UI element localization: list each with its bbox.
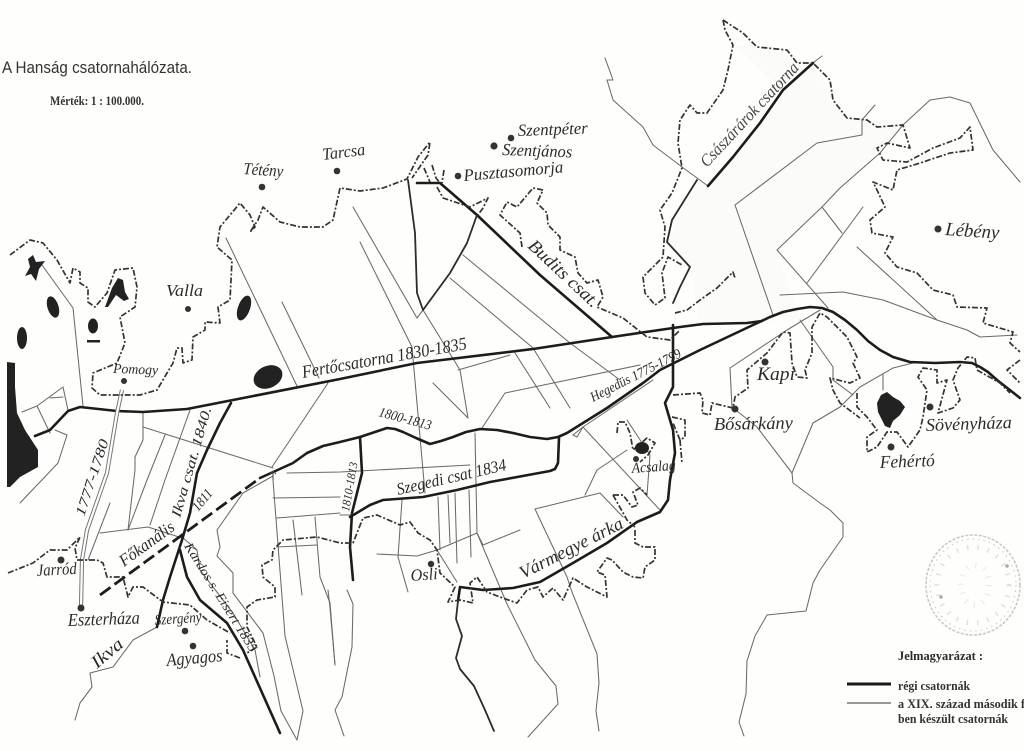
- canal: Szegedi: [350, 438, 559, 517]
- place name: Eszterháza: Eszterháza: [67, 607, 140, 630]
- canal: north connector: [667, 180, 697, 303]
- place name: Szergény: Szergény: [154, 610, 202, 629]
- canal: double dotted 1777-1780: [81, 390, 122, 607]
- pond: Fehértó lake: [877, 392, 905, 428]
- label: 1811: 1811: [190, 487, 216, 515]
- legend item: old canals: régi csatornák: [898, 679, 970, 693]
- place name: Tarcsa: Tarcsa: [321, 140, 366, 164]
- label: 1810-1813: 1810-1813: [338, 461, 361, 513]
- legend item: new canals: [847, 697, 1024, 726]
- place name: Pomogy: Pomogy: [112, 362, 159, 379]
- place name: Szentjános: Szentjános: [502, 140, 573, 161]
- label: Kardos és Eisert 1835: Kardos s. Eisert 1835: [181, 539, 261, 655]
- canal: Ikva: [157, 403, 231, 627]
- library stamp: [926, 535, 1020, 635]
- legend: [847, 648, 1024, 726]
- label: Főkanális: Főkanális: [114, 517, 178, 571]
- label: Vármegye árka: Vármegye árka: [516, 513, 626, 583]
- label: Ikva river: Ikva: [86, 634, 127, 673]
- canal: Császárárok: [708, 63, 813, 186]
- pond: oval 3: [88, 318, 98, 334]
- label: Szegedi csat 1834: Szegedi csat 1834: [395, 455, 508, 499]
- canal: Főkanális dashed: [100, 478, 260, 595]
- label: Hegedüs 1775-1799: Hegedüs 1775-1799: [587, 347, 684, 406]
- label: Fertőcsatorna 1830-1835: Fertőcsatorna 1830-1835: [299, 333, 468, 382]
- settlements: [36, 119, 1012, 670]
- canal: Fertőcsatorna: [35, 321, 762, 436]
- label: 1800-1813: 1800-1813: [377, 405, 433, 434]
- dots: [58, 135, 942, 649]
- place name: Agyagos: Agyagos: [165, 645, 223, 670]
- place name: Bősárkány: Bősárkány: [714, 413, 793, 434]
- legend item: new canals: a XIX. század második f: [898, 697, 1024, 711]
- scale note: Mérték: 1 : 100.000.: [50, 94, 144, 108]
- place name: Pusztasomorja: Pusztasomorja: [462, 157, 564, 185]
- place name: Osli: Osli: [410, 564, 438, 585]
- place name: Fehértó: Fehértó: [878, 450, 935, 472]
- pond: small bar: [87, 340, 100, 342]
- legend heading: Jelmagyarázat :: [898, 648, 983, 663]
- label: Ikva csat. 1840: Ikva csat. 1840.: [169, 405, 215, 520]
- canal: Vármegye árka: [458, 325, 675, 601]
- place name: Lébény: Lébény: [944, 219, 1001, 244]
- river: south of Vármegye árka: [456, 601, 494, 731]
- pond: near Fertő canal: [250, 361, 286, 393]
- canal: Hegedüs and 1800-1813: [260, 307, 1020, 478]
- place name: Jarród: Jarród: [36, 559, 78, 580]
- legend item: new canals: ben készült csatornák: [898, 712, 1008, 726]
- marsh ponds: [7, 255, 905, 487]
- canal: triangle: [408, 180, 477, 310]
- pond: Acsalag: [635, 442, 649, 454]
- canal labels: [74, 58, 803, 673]
- pond: oval 2: [17, 327, 27, 349]
- title: A Hanság csatornahálózata.: [2, 58, 192, 77]
- place name: Acsalag: Acsalag: [630, 458, 677, 477]
- label: 1777-1780: 1777-1780: [74, 438, 113, 518]
- pond: large western lake: [7, 362, 38, 487]
- place name: Szentpéter: Szentpéter: [517, 119, 588, 140]
- canal: 1810-1813: [350, 437, 362, 580]
- pond: east of Valla: [234, 294, 254, 322]
- pond: star: [25, 255, 45, 281]
- pond: A-shaped: [105, 278, 129, 307]
- canal: Kardos és Eisert: [180, 550, 280, 733]
- pond: oval 1: [44, 295, 62, 319]
- label: Budits csat.: Budits csat.: [524, 235, 604, 311]
- place name: Sövényháza: Sövényháza: [925, 412, 1012, 435]
- place name: Tétény: Tétény: [243, 159, 284, 181]
- arrow at junction: [270, 471, 276, 480]
- legend item: old canals: [847, 679, 970, 693]
- label: Császárárok csatorna: Császárárok csatorna: [696, 58, 803, 171]
- canal: Budits: [417, 183, 612, 337]
- place name: Kapi: Kapi: [756, 364, 795, 385]
- place name: Valla: Valla: [166, 281, 203, 300]
